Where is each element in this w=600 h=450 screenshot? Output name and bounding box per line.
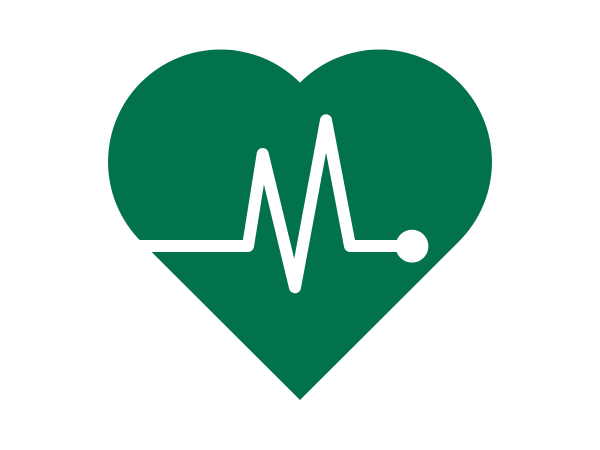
heart shape <box>108 50 492 400</box>
heartbeat pulse line <box>130 120 428 287</box>
